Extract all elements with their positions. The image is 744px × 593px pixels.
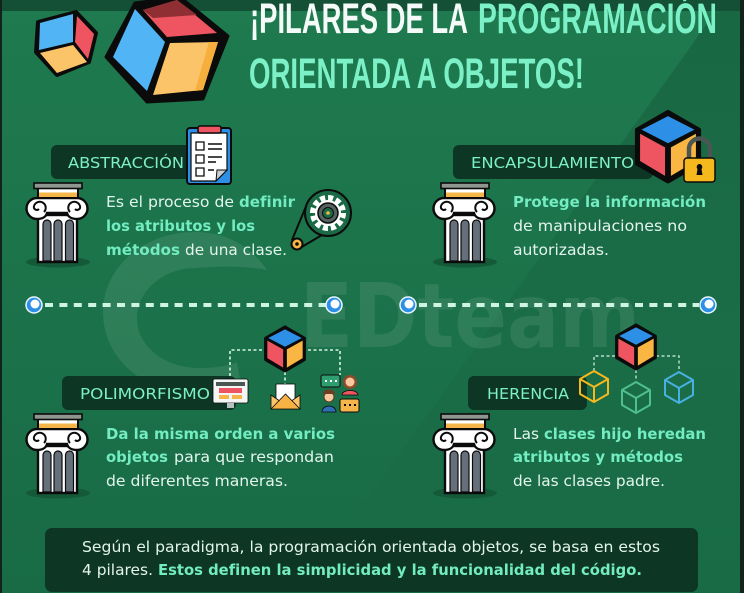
watermark: EDteam logo: EDteam xyxy=(300,264,640,368)
text: encapsulamiento: autorizadas. xyxy=(513,241,609,259)
text: encapsulamiento: Protege la información xyxy=(513,193,706,211)
label pill: abstracción xyxy=(51,145,191,179)
text: polimorfismo: para que respondan xyxy=(174,448,334,466)
icon: green child cube xyxy=(622,382,650,413)
icon: pillar xyxy=(26,414,90,498)
callout: summary xyxy=(45,528,698,592)
connector lines: polimorfismo xyxy=(230,350,340,386)
text: abstracción: de una clase. xyxy=(185,241,287,259)
icon: gear and pulley xyxy=(292,190,351,250)
icon: pillar xyxy=(26,183,90,268)
text: herencia: clases hijo heredan xyxy=(544,425,706,443)
panel: herencia xyxy=(433,325,706,498)
text: herencia: Las xyxy=(513,425,539,443)
panel: polimorfismo xyxy=(26,327,359,498)
text: polimorfismo: Da la misma orden a varios xyxy=(106,425,335,443)
panel: encapsulamiento xyxy=(433,112,715,268)
icon: yellow child cube xyxy=(580,371,608,402)
text: abstracción: definir xyxy=(239,193,295,211)
text: herencia xyxy=(513,425,706,490)
icon: cube xyxy=(265,327,305,371)
callout: summary: Según el paradigma, la programación orientada objetos, se basa en estos xyxy=(82,538,660,556)
text: abstracción: métodos xyxy=(106,241,180,259)
label pill: polimorfismo: POLIMORFISMO xyxy=(80,385,210,403)
label pill: herencia xyxy=(468,376,587,410)
icon: cube with lock xyxy=(637,112,715,182)
label pill: encapsulamiento xyxy=(453,145,653,179)
icon: pillar xyxy=(433,183,497,268)
icon: clipboard xyxy=(187,126,231,184)
icon: blue child cube xyxy=(665,372,693,403)
label pill: herencia: HERENCIA xyxy=(487,385,569,403)
text: encapsulamiento: de manipulaciones no xyxy=(513,217,687,235)
text: encapsulamiento xyxy=(513,193,706,259)
watermark: EDteam logo xyxy=(103,232,640,392)
icon: small cube xyxy=(36,12,96,75)
text: abstracción: Es el proceso de xyxy=(106,193,234,211)
icon: envelope xyxy=(271,384,300,409)
icon: pillar xyxy=(433,414,497,498)
callout: summary: 4 pilares. xyxy=(82,561,153,579)
callout: summary: Estos definen la simplicidad y la funcionalidad del código. xyxy=(158,561,642,579)
divider: left dashed line xyxy=(26,297,342,313)
label pill: encapsulamiento: ENCAPSULAMIENTO xyxy=(471,154,634,172)
text: polimorfismo: objetos xyxy=(106,448,168,466)
icon: large cube xyxy=(106,0,228,102)
panel: abstracción xyxy=(26,126,351,268)
divider: right dashed line xyxy=(400,297,716,313)
icon: monitor xyxy=(213,379,248,408)
text: abstracción xyxy=(106,193,295,259)
text: herencia: de las clases padre. xyxy=(513,472,665,490)
label pill: abstracción: ABSTRACCIÓN xyxy=(68,153,184,172)
text: abstracción: los atributos y los xyxy=(106,217,255,235)
text: polimorfismo xyxy=(106,425,335,490)
icon: people with chat bubbles xyxy=(321,375,359,412)
text: polimorfismo: de diferentes maneras. xyxy=(106,472,288,490)
icon: parent cube xyxy=(616,325,656,369)
text: herencia: atributos y métodos xyxy=(513,448,683,466)
title xyxy=(249,0,717,98)
label pill: polimorfismo xyxy=(62,376,236,410)
connector lines: herencia xyxy=(594,356,679,381)
